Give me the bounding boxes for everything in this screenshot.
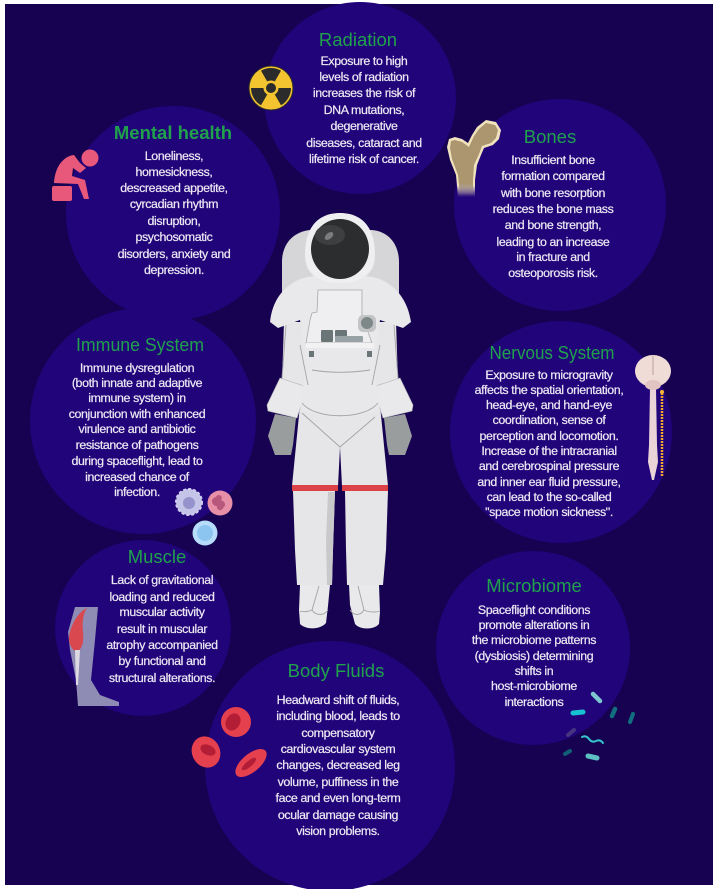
icon: red blood cells [187,707,271,782]
text: muscle description: result in muscular [117,622,207,636]
text: nervous system description: perception and locomotion. [480,429,618,443]
heading: mental health: Mental health [114,122,232,143]
icon: immune cells [176,489,232,546]
text: muscle description: atrophy accompanied [106,638,218,652]
gloves [268,414,412,455]
icon: radiation symbol [249,66,293,110]
text: body fluids description: face and even long-term [276,791,400,805]
forearm cuffs [267,378,413,418]
helmet [305,213,375,283]
text: bones description: osteoporosis risk. [508,266,598,280]
text: bones description: leading to an increase [497,235,610,249]
text: nervous system description: "space motion sickness". [485,505,613,519]
backpack [282,230,399,296]
text: immune system description: virulence and antibiotic [79,422,196,436]
icon: leg with calf muscle [68,607,119,706]
text: radiation description: degenerative [330,119,398,133]
text: immune system description: resistance of pathogens [76,438,199,452]
text: radiation description: DNA mutations, [324,103,404,117]
text: nervous system description: and inner ear fluid pressure, [477,475,621,489]
text: radiation description: levels of radiation [319,70,409,84]
text: mental health description: homesickness, [135,165,213,179]
icon: bacteria [565,694,633,758]
text: immune system description: Immune dysregulation [80,361,195,375]
text: bones description: Insufficient bone [511,153,595,167]
icon: distressed seated person [52,150,98,201]
text: microbiome description: shifts in [515,664,554,678]
panel: body fluids [187,641,455,889]
text: muscle description: by functional and [118,654,206,668]
torso seams [282,325,398,447]
text: body fluids description: volume, puffiness in the [278,775,399,789]
text: nervous system description: coordination, sense of [493,413,606,427]
astronaut figure [267,213,413,628]
text: immune system description: increased chance of [85,470,190,484]
panel: muscle [55,540,231,716]
icon: brain and spinal cord [635,355,671,480]
text: mental health description: disorders, anxiety and [118,247,231,261]
text: radiation description [306,54,422,166]
text: microbiome description: host-microbiome [491,679,577,693]
text: bones description: in fracture and [516,250,590,264]
text: microbiome description: (dysbiosis) determining [475,649,594,663]
boots [299,585,380,628]
text: muscle description: muscular activity [119,605,206,619]
text: nervous system description: affects the spatial orientation, [475,383,623,397]
shoulders [270,274,411,345]
text: mental health description: Loneliness, [145,149,203,163]
text: nervous system description: head-eye, and hand-eye [486,398,612,412]
thighs [292,405,388,486]
red bands [292,485,388,491]
text: mental health description: cyrcadian rhythm [130,197,218,211]
text: microbiome description: Spaceflight conditions [478,603,590,617]
text: microbiome description: interactions [505,695,564,709]
text: mental health description: descreased appetite, [120,181,228,195]
text: bones description: reduces the bone mass [493,202,614,216]
text: body fluids description: cardiovascular system [281,742,395,756]
heading: nervous system: Nervous System [490,342,614,363]
heading: muscle: Muscle [128,546,186,567]
text: mental health description: disruption, [148,214,200,228]
heading: bones: Bones [524,126,576,147]
chest controls [306,315,376,357]
heading: immune system: Immune System [76,334,204,355]
panel: mental health [52,106,280,320]
text: muscle description [106,573,218,685]
panel: microbiome [436,551,633,758]
text: mental health description [118,149,231,277]
text: muscle description: Lack of gravitational [111,573,213,587]
icon: femur bone [447,120,501,197]
text: nervous system description: Increase of the intracranial [481,444,617,458]
text: microbiome description: the microbiome patterns [472,633,596,647]
panel: radiation [249,2,456,194]
heading: radiation: Radiation [319,29,397,50]
text: mental health description: depression. [144,263,204,277]
text: muscle description: structural alterations. [109,671,215,685]
text: radiation description: Exposure to high [321,54,408,68]
panel: nervous system [450,321,672,543]
text: body fluids description: including blood, leads to [276,709,400,723]
text: immune system description: during spaceflight, lead to [72,454,203,468]
text: body fluids description: compensatory [301,726,376,740]
text: radiation description: lifetime risk of cancer. [309,152,419,166]
text: bones description: and bone strength, [505,218,601,232]
panel: immune system [30,308,256,546]
text: body fluids description: ocular damage causing [278,808,399,822]
text: nervous system description: and cerebrospinal pressure [479,459,620,473]
text: nervous system description [475,368,623,519]
text: immune system description [69,361,206,499]
text: radiation description: increases the risk of [313,86,416,100]
text: nervous system description: Exposure to microgravity [485,368,614,382]
text: body fluids description: vision problems. [296,824,380,838]
lower leg shading [326,492,335,585]
chest panel [306,290,372,343]
text: bones description [493,153,614,280]
text: radiation description: diseases, cataract and [306,136,422,150]
upper arms [282,322,398,390]
heading: microbiome: Microbiome [486,575,582,596]
text: immune system description: conjunction with enhanced [69,407,206,421]
text: microbiome description [472,603,596,709]
boot seams [300,586,380,614]
text: body fluids description: Headward shift of fluids, [277,693,399,707]
text: microbiome description: promote alterations in [479,618,590,632]
heading: body fluids: Body Fluids [288,660,384,681]
text: nervous system description: can lead to the so-called [487,490,612,504]
text: body fluids description: changes, decreased leg [276,758,400,772]
text: immune system description: infection. [114,485,160,499]
text: muscle description: loading and reduced [109,590,215,604]
text: immune system description: (both innate and adaptive [72,376,203,390]
lower legs [293,491,388,585]
text: bones description: formation compared [501,169,605,183]
text: bones description: with bone resorption [500,186,605,200]
panel: bones [447,99,666,311]
torso [300,320,380,420]
text: immune system description: immune system) in [88,391,186,405]
text: mental health description: psychosomatic [135,230,213,244]
text: body fluids description [276,693,400,838]
